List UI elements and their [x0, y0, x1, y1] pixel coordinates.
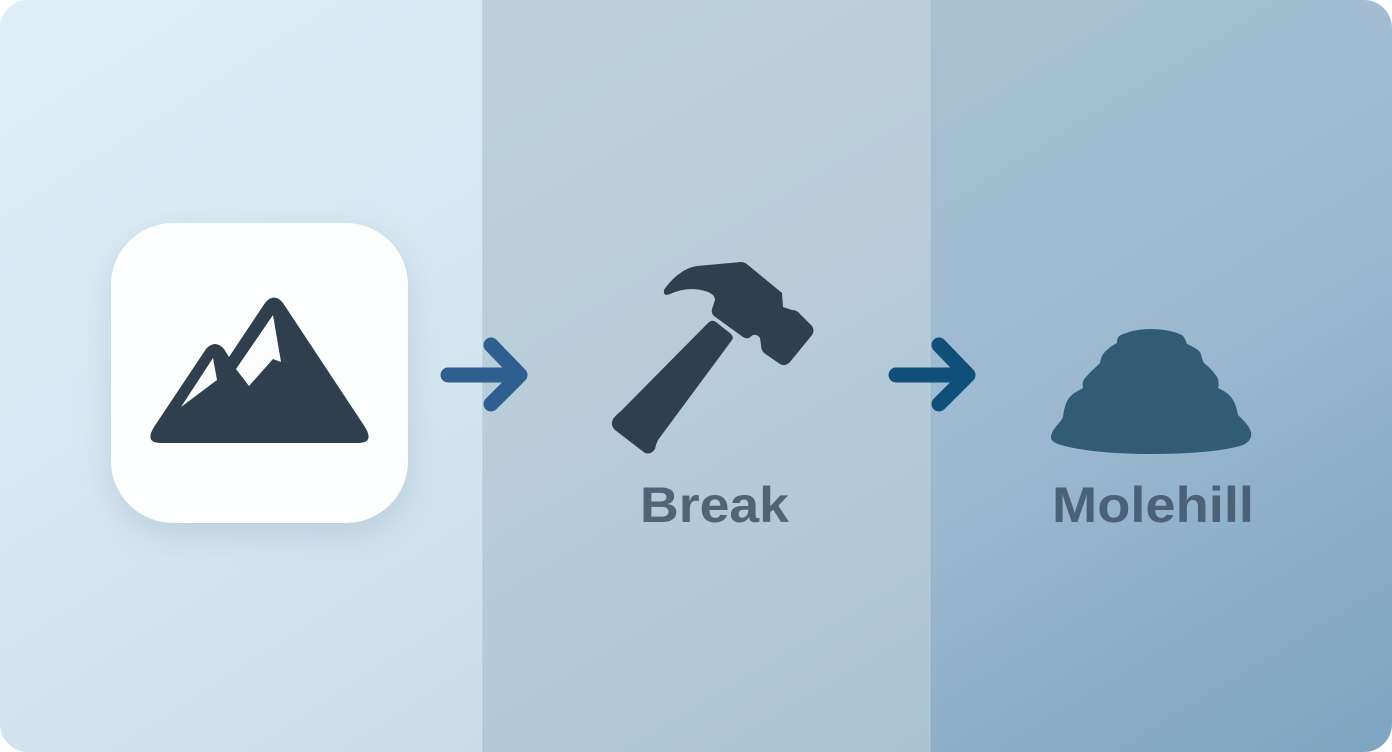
icon: hammer [612, 262, 814, 454]
arrow: mountain to break [448, 345, 520, 404]
icon: molehill [1051, 329, 1251, 454]
arrow: break to molehill [896, 345, 968, 404]
panel: break [482, 0, 930, 752]
hammer handle [612, 321, 733, 454]
hammer head [664, 262, 814, 365]
label: Break: Break [640, 477, 789, 533]
card: white rounded square [111, 223, 408, 523]
panel: mountain [0, 0, 482, 752]
icon: mountain [150, 298, 369, 443]
card shadow [111, 233, 408, 533]
label: Molehill: Molehill [1052, 477, 1254, 533]
panel: molehill [930, 0, 1392, 752]
